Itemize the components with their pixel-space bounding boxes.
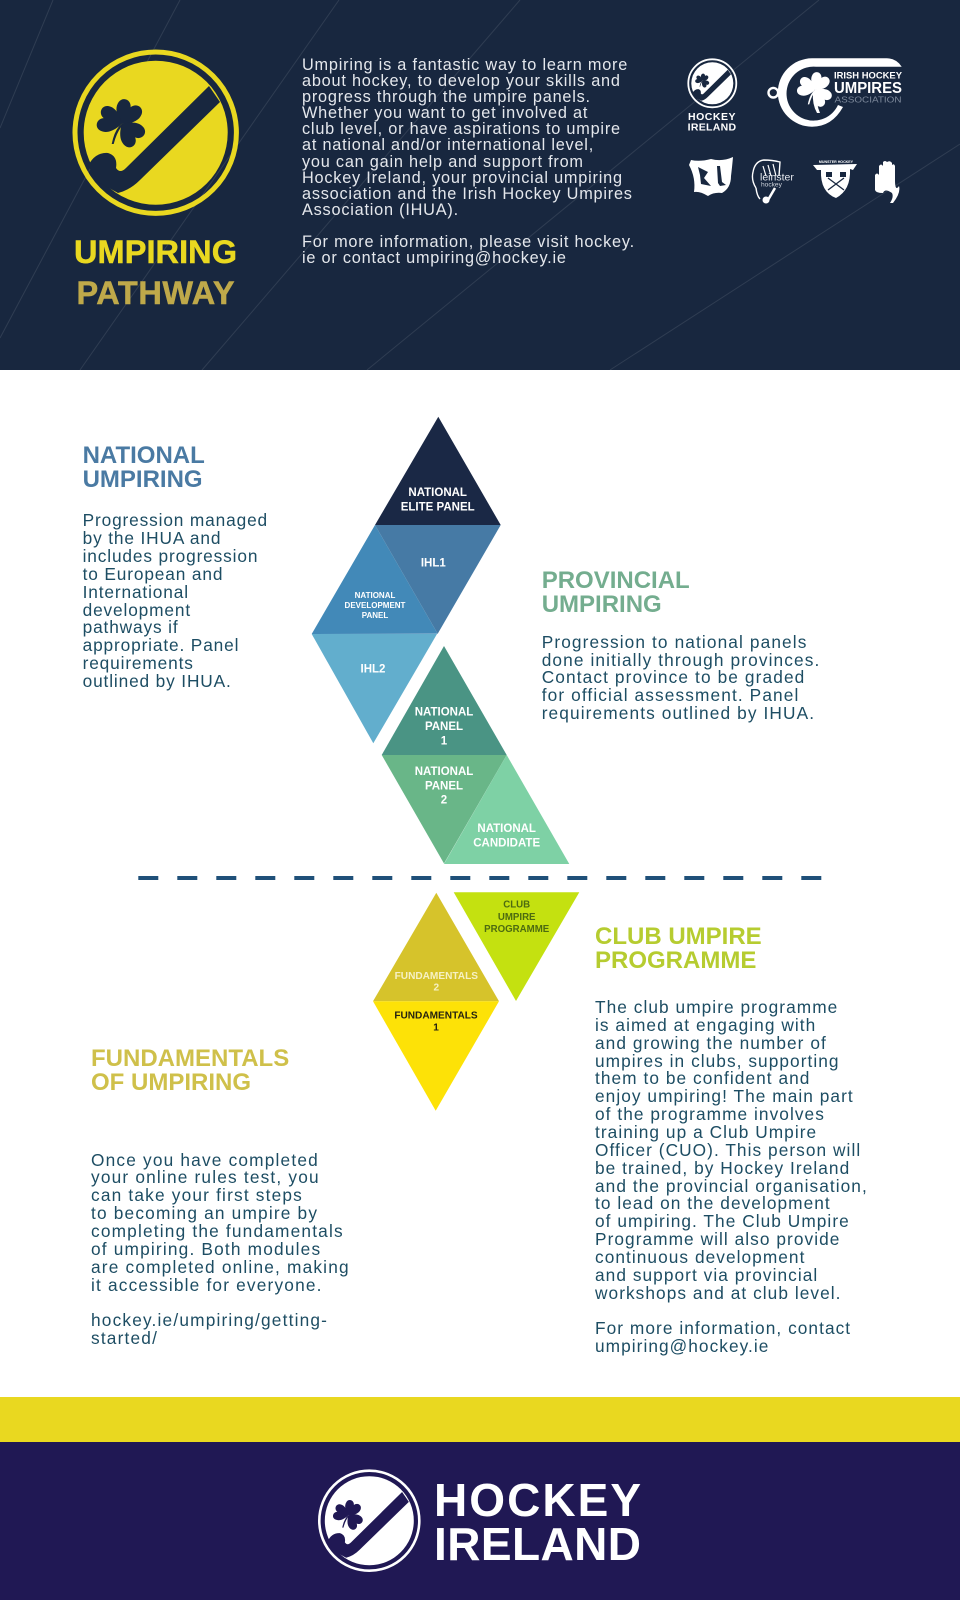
triangle: ihl1: IHL1	[421, 558, 446, 570]
heading: fundamentals of umpiring: FUNDAMENTALS	[91, 1045, 289, 1072]
icon: umpiring pathway logo	[75, 52, 236, 213]
icon: leinster hockey harp logo: leinster	[760, 172, 794, 184]
text: club umpire programme: of the programme involves	[595, 1104, 825, 1124]
heading: club umpire programme: CLUB UMPIRE	[595, 923, 762, 950]
header band	[0, 0, 960, 370]
text: fundamentals of umpiring: can take your first steps	[91, 1185, 303, 1205]
text: national umpiring: outlined by IHUA.	[83, 671, 232, 691]
text: club umpire programme: and growing the number of	[595, 1033, 827, 1053]
triangle: ihl2	[312, 634, 437, 743]
triangle: national development panel: DEVELOPMENT	[345, 601, 406, 610]
triangle: national panel 2: 2	[441, 795, 447, 807]
text: provincial umpiring	[542, 632, 820, 723]
triangle: national panel 2: PANEL	[425, 780, 463, 792]
footer navy band with hockey ireland logo	[0, 1442, 960, 1600]
triangle: fundamentals 1	[373, 1001, 499, 1111]
text: provincial umpiring: Contact province to be graded	[542, 667, 805, 687]
text: fundamentals of umpiring: completing the fundamentals	[91, 1221, 344, 1241]
text: provincial umpiring: for official assessment. Panel	[542, 685, 799, 705]
text: club umpire programme: Officer (CUO). This person will	[595, 1140, 861, 1160]
text: fundamentals of umpiring: to becoming an umpire by	[91, 1203, 318, 1223]
heading: fundamentals of umpiring	[91, 1045, 289, 1096]
header intro text: Association (IHUA).	[302, 201, 459, 219]
triangle: national elite panel	[375, 417, 501, 525]
icon: leinster hockey harp logo: hockey	[761, 182, 783, 189]
header intro text: at national and/or international level,	[302, 136, 594, 154]
icon: umpire hand	[875, 161, 899, 203]
triangle: national development panel: NATIONAL	[355, 591, 395, 600]
header intro text: Hockey Ireland, your provincial umpiring	[302, 169, 623, 187]
text: national umpiring: International	[83, 582, 189, 602]
triangle: ihl1	[375, 525, 501, 634]
text: national umpiring	[82, 510, 268, 691]
header intro text: For more information, please visit hockey.	[302, 233, 635, 251]
text: fundamentals of umpiring: it accessible for everyone.	[91, 1274, 323, 1294]
heading: fundamentals of umpiring: OF UMPIRING	[91, 1069, 251, 1096]
triangle: club umpire programme: CLUB	[503, 900, 530, 911]
triangle: ihl2: IHL2	[361, 663, 385, 675]
text: provincial umpiring: Progression to national panels	[542, 632, 807, 652]
title: umpiring pathway: PATHWAY	[76, 275, 235, 311]
icon: hockey ireland small logo: IRELAND	[688, 122, 736, 134]
triangle diagram: fundamentals and club	[373, 892, 579, 1111]
text: national umpiring: to European and	[83, 564, 223, 584]
triangle: national development panel: PANEL	[362, 611, 388, 620]
heading: club umpire programme	[595, 923, 762, 974]
icon: munster hockey crest: MUNSTER HOCKEY	[819, 160, 854, 164]
text: club umpire programme: training up a Club Umpire	[595, 1122, 817, 1142]
text: club umpire programme: continuous development	[595, 1247, 805, 1267]
text: club umpire programme: umpiring@hockey.ie	[595, 1336, 769, 1356]
text: club umpire programme: of umpiring. The Club Umpire	[595, 1211, 850, 1231]
triangle: club umpire programme	[454, 892, 579, 1001]
icon: leinster hockey harp logo	[752, 160, 794, 204]
triangle: fundamentals 2: FUNDAMENTALS	[395, 971, 478, 982]
text: club umpire programme: to lead on the development	[595, 1193, 831, 1213]
triangle: national panel 1: NATIONAL	[415, 707, 473, 719]
text: club umpire programme: enjoy umpiring! The main part	[595, 1086, 854, 1106]
triangle: national candidate: CANDIDATE	[473, 837, 540, 849]
icon: irish hockey umpires association whistle logo	[768, 58, 902, 127]
text: club umpire programme: For more information, contact	[595, 1318, 851, 1338]
header intro text: Umpiring is a fantastic way to learn more	[302, 56, 628, 74]
triangle: fundamentals 1: FUNDAMENTALS	[394, 1010, 478, 1021]
icon: hockey ireland logo	[319, 1471, 419, 1571]
title: umpiring pathway: UMPIRING	[74, 234, 237, 270]
triangle: fundamentals 2: 2	[433, 983, 439, 994]
text: fundamentals of umpiring: hockey.ie/umpiring/getting-	[91, 1310, 328, 1330]
heading: provincial umpiring	[542, 567, 690, 618]
text: provincial umpiring: requirements outlined by IHUA.	[542, 703, 815, 723]
text: club umpire programme: and support via provincial	[595, 1265, 818, 1285]
text: club umpire programme: workshops and at club level.	[595, 1283, 842, 1303]
text: fundamentals of umpiring: are completed online, making	[91, 1257, 350, 1277]
text: club umpire programme: them to be confident and	[595, 1068, 810, 1088]
heading: club umpire programme: PROGRAMME	[595, 947, 756, 974]
triangle: national panel 2: NATIONAL	[415, 766, 473, 778]
text: fundamentals of umpiring: your online rules test, you	[91, 1167, 320, 1187]
icon: munster hockey crest	[813, 160, 857, 198]
text: club umpire programme: and the provincial organisation,	[595, 1176, 868, 1196]
text: national umpiring: appropriate. Panel	[83, 635, 239, 655]
text: provincial umpiring: done initially through provinces.	[542, 650, 820, 670]
text: hockey ireland wordmark	[434, 1474, 641, 1570]
triangle: national candidate: NATIONAL	[477, 823, 536, 835]
text: fundamentals of umpiring: Once you have completed	[91, 1150, 319, 1170]
text: club umpire programme: The club umpire programme	[595, 997, 838, 1017]
triangle: national elite panel: ELITE PANEL	[401, 501, 475, 513]
triangle: fundamentals 1: 1	[433, 1023, 439, 1034]
header intro text	[302, 56, 635, 267]
triangle: fundamentals 2	[373, 893, 499, 1001]
heading: national umpiring: UMPIRING	[83, 466, 203, 493]
header intro text: Whether you want to get involved at	[302, 104, 588, 122]
text: national umpiring: development	[83, 600, 191, 620]
triangle: national elite panel: NATIONAL	[408, 487, 467, 499]
text: club umpire programme: umpires in clubs, supporting	[595, 1051, 840, 1071]
text: national umpiring: includes progression	[83, 546, 258, 566]
text: hockey ireland wordmark: IRELAND	[434, 1518, 641, 1570]
header intro text: ie or contact umpiring@hockey.ie	[302, 249, 567, 267]
text: national umpiring: requirements	[83, 653, 194, 673]
header intro text: club level, or have aspirations to umpire	[302, 120, 621, 138]
text: club umpire programme	[595, 997, 868, 1356]
header intro text: about hockey, to develop your skills and	[302, 72, 621, 90]
text: fundamentals of umpiring: started/	[91, 1328, 158, 1348]
footer yellow band	[0, 1397, 960, 1442]
triangle: club umpire programme: UMPIRE	[498, 912, 536, 923]
triangle: national panel 1	[382, 646, 507, 755]
header intro text: association and the Irish Hockey Umpires	[302, 185, 633, 203]
triangle: club umpire programme: PROGRAMME	[484, 924, 550, 935]
icon: hockey ireland small logo: HOCKEY	[688, 111, 736, 123]
header intro text: you can gain help and support from	[302, 153, 584, 171]
text: hockey ireland wordmark: HOCKEY	[434, 1474, 641, 1526]
triangle diagram: national and provincial panels	[312, 417, 569, 864]
text: club umpire programme: be trained, by Hockey Ireland	[595, 1158, 850, 1178]
text: national umpiring: pathways if	[83, 617, 179, 637]
icon: hockey ireland small logo	[688, 59, 736, 134]
triangle: national panel 1: PANEL	[425, 721, 463, 733]
text: fundamentals of umpiring: of umpiring. Both modules	[91, 1239, 321, 1259]
text: national umpiring: Progression managed	[83, 510, 268, 530]
header intro text: progress through the umpire panels.	[302, 88, 591, 106]
triangle: national candidate	[444, 755, 569, 864]
heading: provincial umpiring: UMPIRING	[542, 591, 662, 618]
icon: irish hockey umpires association whistle logo: UMPIRES	[834, 80, 902, 97]
icon: provincial shield crest	[689, 157, 733, 196]
heading: provincial umpiring: PROVINCIAL	[542, 567, 690, 594]
triangle: national panel 2	[382, 755, 507, 864]
triangle: national panel 1: 1	[441, 735, 448, 747]
icon: irish hockey umpires association whistle logo: IRISH HOCKEY	[834, 70, 902, 80]
triangle: national development panel	[312, 525, 438, 634]
icon: irish hockey umpires association whistle logo: ASSOCIATION	[834, 94, 902, 104]
text: club umpire programme: Programme will also provide	[595, 1229, 840, 1249]
text: national umpiring: by the IHUA and	[83, 528, 221, 548]
heading: national umpiring	[83, 442, 205, 493]
text: club umpire programme: is aimed at engaging with	[595, 1015, 816, 1035]
title: umpiring pathway	[74, 234, 237, 311]
heading: national umpiring: NATIONAL	[83, 442, 205, 468]
text: fundamentals of umpiring	[91, 1150, 350, 1348]
